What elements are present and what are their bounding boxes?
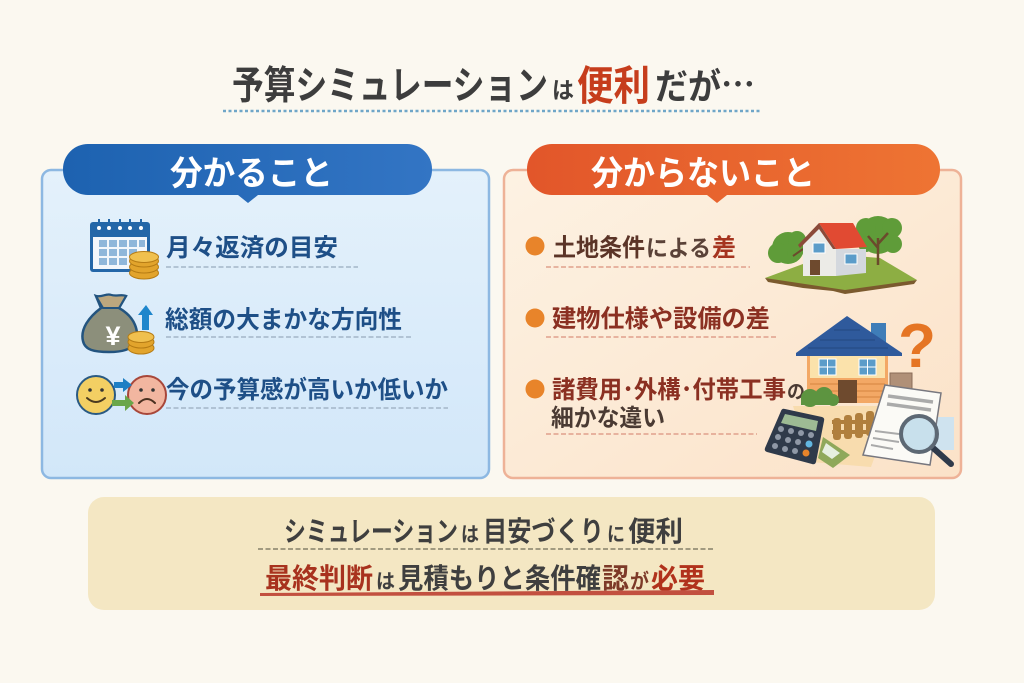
- magnifier: [901, 416, 951, 464]
- title: は: [552, 77, 574, 103]
- panel: conclusion: [88, 497, 935, 610]
- door: [838, 380, 857, 403]
- red underline: [260, 590, 714, 596]
- text: シミュレーションは目安づくりに便利: シミュレーション: [284, 516, 458, 547]
- item: 諸費用・外構・付帯工事の細かな違い: 細かな違い: [551, 405, 665, 432]
- icon: house on land with trees: [765, 216, 917, 294]
- item: 月々返済の目安: 月々返済の目安: [166, 234, 338, 262]
- text: 最終判断は見積もりと条件確認が必要: が: [630, 569, 649, 593]
- text: 最終判断は見積もりと条件確認が必要: 見積もりと条件確: [398, 563, 601, 594]
- panel: what you can know: [42, 144, 489, 478]
- icon: money bag with coins: ¥: [105, 321, 121, 351]
- calculator: [765, 409, 824, 464]
- text: 最終判断は見積もりと条件確認が必要: 最終判断: [265, 563, 373, 594]
- item: 総額の大まかな方向性: 総額の大まかな方向性: [165, 306, 402, 334]
- text: 最終判断は見積もりと条件確認が必要: 認: [602, 563, 629, 594]
- icon: house with question mark and documents: [765, 312, 954, 468]
- bullet: [526, 380, 544, 398]
- text: シミュレーションは目安づくりに便利: は: [461, 524, 479, 546]
- text: シミュレーションは目安づくりに便利: 便利: [628, 516, 683, 547]
- text: 最終判断は見積もりと条件確認が必要: は: [376, 571, 395, 593]
- conclusion background: [88, 497, 935, 610]
- fence: [832, 410, 888, 440]
- item: 土地条件による差: [553, 234, 736, 262]
- item: 土地条件による差: 土地条件: [553, 234, 645, 262]
- item: 土地条件による差: 差: [712, 234, 736, 262]
- bullet: [526, 308, 544, 328]
- item: 建物仕様や設備の差: 建物仕様や設備の差: [552, 305, 770, 333]
- icon: calendar with coins: [90, 219, 158, 279]
- panel: what you cannot know: [504, 144, 961, 478]
- header: 分からないこと: [527, 144, 940, 203]
- document: [863, 385, 941, 465]
- text: シミュレーションは目安づくりに便利: に: [607, 524, 625, 546]
- back paper: [903, 417, 954, 450]
- crates: [890, 373, 912, 389]
- item: 諸費用・外構・付帯工事の細かな違い: [551, 376, 805, 432]
- bush: [801, 387, 839, 407]
- chimney: [871, 323, 886, 343]
- icon: money bag with coins: [82, 295, 154, 354]
- yard: [793, 406, 891, 467]
- question mark: ?: [898, 312, 936, 381]
- item: 諸費用・外構・付帯工事の細かな違い: 諸費用･外構･付帯工事: [552, 376, 786, 404]
- title: 便利: [577, 63, 650, 109]
- item: 今の予算感が高いか低いか: 今の予算感が高いか低いか: [166, 375, 448, 404]
- text: シミュレーションは目安づくりに便利: 目安づくり: [483, 516, 604, 547]
- title: だが: [655, 66, 721, 107]
- header: 分かること: 分かること: [170, 155, 333, 193]
- panel background: [504, 170, 961, 478]
- roof: [796, 316, 902, 356]
- bullet: [526, 236, 544, 256]
- text: 最終判断は見積もりと条件確認が必要: [265, 563, 705, 594]
- header: 分からないこと: 分からないこと: [591, 155, 815, 193]
- title: 予算シミュレーション: [232, 65, 548, 108]
- header: 分かること: [63, 144, 432, 203]
- windows: [819, 359, 836, 375]
- title: …: [721, 58, 755, 107]
- icon: smile and sad faces with arrows: [77, 376, 166, 414]
- item: 土地条件による差: による: [646, 235, 711, 261]
- text: 最終判断は見積もりと条件確認が必要: 必要: [651, 563, 705, 594]
- card: [818, 437, 850, 468]
- text: シミュレーションは目安づくりに便利: [284, 516, 683, 547]
- walls: [807, 353, 888, 403]
- title: [232, 58, 755, 109]
- panel background: [42, 170, 489, 478]
- item: 諸費用・外構・付帯工事の細かな違い: の: [787, 382, 805, 403]
